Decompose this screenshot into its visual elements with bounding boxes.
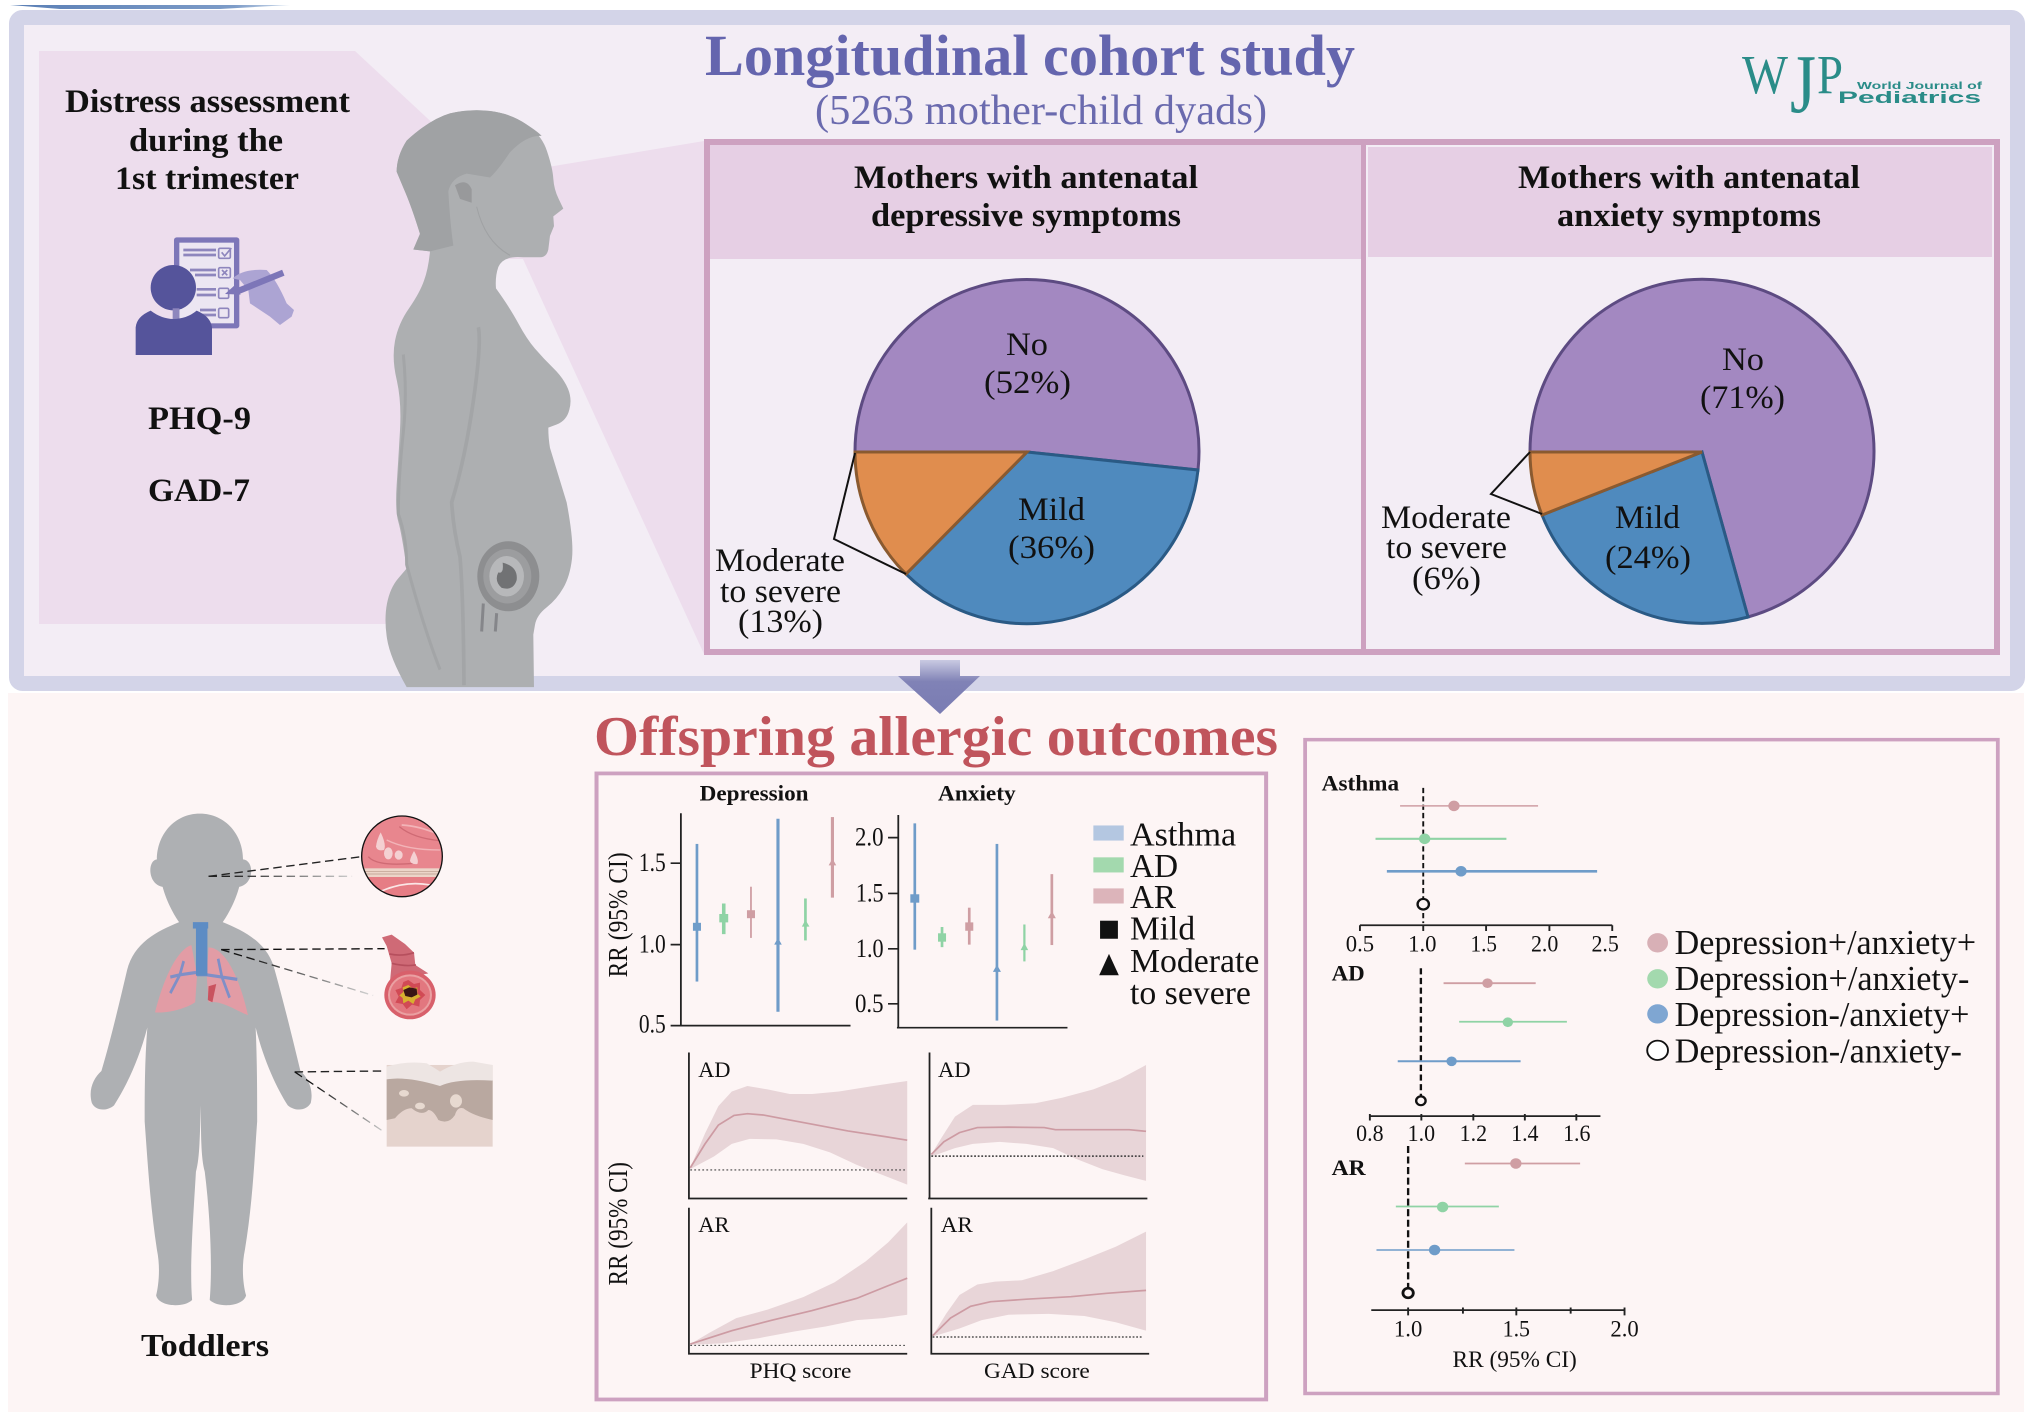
pie chart: depressive symptoms: (36%) [1008,530,1095,566]
icon: nasal mucosa circle [360,816,443,900]
chart: AD by GAD score: AD [938,1057,971,1083]
title: Longitudinal cohort study [705,23,1355,88]
forest plot: AR [1332,1146,1639,1373]
forest plot: AD: 1.0 [1408,1122,1435,1147]
forest plot: asthma: 2.5 [1591,932,1619,957]
header: anxiety symptoms: Mothers with antenatal [1518,160,1860,196]
logo: WJP World Journal of Pediatrics: World Journal of [1857,80,1983,92]
chart: AR by GAD score [930,1208,1149,1354]
y axis label: spline charts: RR (95% CI) [602,1162,633,1285]
chart: AR by PHQ score [688,1208,907,1354]
heading: offspring allergic outcomes: Offspring allergic outcomes [594,706,1278,768]
logo: WJP World Journal of Pediatrics: Pediatrics [1838,88,1981,107]
pie chart: depressive symptoms: No [1006,327,1048,363]
forest plot: AD [1332,961,1600,1147]
pregnant woman silhouette [385,110,572,687]
forest plot: AR: 1.0 [1394,1317,1422,1342]
x axis labels: scores: PHQ score [750,1359,851,1384]
funnel background shape [500,141,704,654]
scale labels: GAD-7 [148,473,250,509]
chart: depression error bars: 1.0 [639,929,666,958]
logo: WJP World Journal of Pediatrics: J [1790,38,1816,131]
forest plot: asthma: 1.5 [1470,932,1497,957]
icon: person filling questionnaire [136,237,294,355]
pie chart: depressive symptoms: (52%) [984,365,1071,401]
lungs [155,922,248,1015]
chart: depression error bars: 1.5 [639,848,666,877]
forest plot: AR: 1.5 [1503,1317,1530,1342]
forest plot: AR: RR (95% CI) [1453,1348,1577,1373]
chart: anxiety error bars: 0.5 [855,989,884,1018]
legend: exposure groups: Depression-/anxiety- [1675,1032,1962,1070]
pie chart: anxiety symptoms: No [1722,342,1764,378]
chart: anxiety error bars: 2.0 [855,822,884,851]
chart: AD by PHQ score: AD [698,1057,730,1083]
icon: skin section [387,1062,493,1147]
pie chart: anxiety symptoms: (24%) [1605,540,1691,576]
logo: WJP World Journal of Pediatrics: W [1742,44,1788,105]
chart: anxiety error bars [855,781,1067,1028]
legend: outcome and severity [1093,817,1259,1012]
panel: joint exposure forest plots [1305,740,1998,1393]
panel: offspring allergic outcomes background [8,693,2024,1412]
chart: AR by GAD score: AR [941,1213,973,1238]
chart: anxiety error bars: 1.0 [856,934,884,963]
assessment background shape [39,51,440,624]
panel: longitudinal cohort study [16,18,2018,687]
header: depressive symptoms [710,145,1361,259]
chart: anxiety error bars: 1.5 [856,878,884,907]
fetus in womb [477,541,539,631]
forest plot: asthma: 1.0 [1408,932,1436,957]
chart: AD by GAD score [928,1052,1147,1199]
legend: exposure groups: Depression-/anxiety+ [1675,995,1969,1034]
chart: depression error bars [602,781,851,1039]
forest plot: AR: AR [1332,1156,1366,1180]
title: (5263 mother-child dyads) [815,88,1267,134]
pie chart: anxiety symptoms: Mild [1615,500,1680,536]
toddler illustration [91,814,493,1305]
legend: outcome and severity: AR [1130,879,1177,916]
panel: RR charts [597,773,1266,1399]
arrow [898,660,980,714]
child silhouette with lungs [91,814,385,1305]
dashed leader lines [209,857,385,1131]
forest plot: AD: 1.4 [1511,1122,1539,1147]
forest plot: AD: 1.6 [1563,1122,1591,1147]
legend: outcome and severity: Asthma [1130,817,1236,853]
pie chart: anxiety symptoms: Moderate [1381,500,1511,536]
assessment text: during the [129,123,283,159]
legend: outcome and severity: Mild [1130,911,1195,947]
header: anxiety symptoms [1368,147,1992,257]
forest plot: AD: 0.8 [1356,1122,1384,1147]
panel: symptom pie frame [707,142,1997,652]
chart: depression error bars: Depression [700,781,809,807]
legend: outcome and severity: AD [1130,848,1178,885]
pie chart: anxiety symptoms [1381,279,1874,623]
assessment text: 1st trimester [115,161,299,197]
chart: AR by PHQ score: AR [698,1213,730,1238]
pie chart: depressive symptoms: to severe [720,574,841,610]
logo: WJP World Journal of Pediatrics: P [1817,44,1843,105]
x axis labels: scores [750,1359,1090,1384]
pie chart: anxiety symptoms: (6%) [1412,561,1481,597]
forest plot: asthma: Asthma [1322,771,1400,795]
assessment text: Distress assessment [65,84,350,120]
forest plot: asthma [1322,771,1619,957]
legend: exposure groups: Depression+/anxiety- [1675,959,1969,998]
x axis labels: scores: GAD score [984,1359,1090,1384]
chart: AD by PHQ score [688,1052,907,1199]
chart: anxiety error bars: Anxiety [938,781,1016,807]
forest plot: AD: 1.2 [1460,1122,1487,1147]
forest plot: asthma: 2.0 [1531,932,1558,957]
legend: outcome and severity: Moderate [1130,943,1259,980]
forest plot: AR: 2.0 [1610,1317,1639,1342]
pie chart: anxiety symptoms: (71%) [1700,380,1785,416]
pie chart: depressive symptoms: Moderate [715,543,845,579]
header: anxiety symptoms: anxiety symptoms [1557,198,1821,234]
assessment text [65,84,350,197]
title [705,23,1355,134]
pie chart: depressive symptoms: (13%) [738,604,823,640]
scale labels [148,401,251,509]
pie chart: depressive symptoms [715,279,1199,640]
icon: inflamed airway [382,935,436,1019]
pie chart: anxiety symptoms: to severe [1386,530,1507,566]
callouts [360,816,493,1147]
scale labels: PHQ-9 [148,401,251,437]
forest plot: AD: AD [1332,961,1365,985]
label: toddlers: Toddlers [141,1327,269,1363]
chart: depression error bars: RR (95% CI) [602,852,633,977]
logo: WJP World Journal of Pediatrics [1742,38,1983,131]
chart: depression error bars: 0.5 [639,1009,666,1039]
legend: exposure groups [1647,923,1976,1070]
pie chart: depressive symptoms: Mild [1018,492,1086,528]
top accent line [10,5,290,9]
forest plot: asthma: 0.5 [1346,932,1374,957]
legend: exposure groups: Depression+/anxiety+ [1675,923,1976,961]
header: depressive symptoms: Mothers with antenatal [854,160,1198,196]
header: depressive symptoms: depressive symptoms [871,198,1181,234]
legend: outcome and severity: to severe [1130,975,1251,1012]
